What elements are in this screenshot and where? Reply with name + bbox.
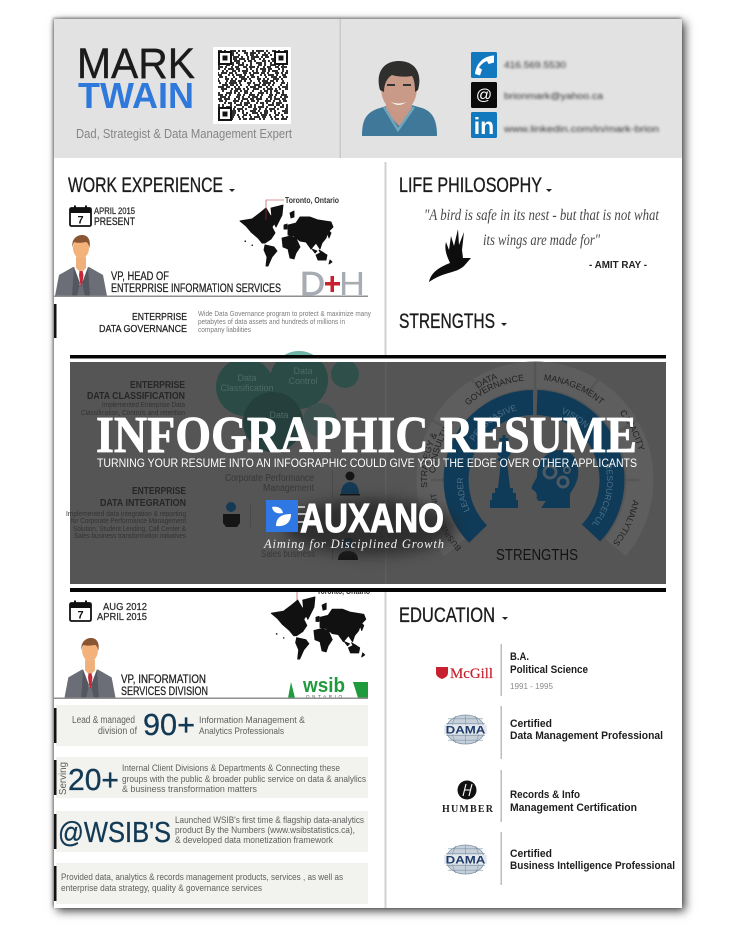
icon: manager at desk: [340, 472, 360, 496]
wheel labels: DATA: [476, 374, 498, 388]
second job: calendar icon: [70, 600, 91, 622]
job title: [111, 271, 281, 295]
stat box: 20+: & business transformation matters: [122, 784, 257, 795]
education: McGill: 1991 - 1995: [510, 682, 554, 691]
name: [77, 40, 195, 116]
logo: WSIB: ONTARIO: [306, 694, 342, 699]
banner title: INFOGRAPHIC RESUME: [96, 407, 637, 464]
banner subtitle: TURNING YOUR RESUME INTO AN INFOGRAPHIC COULD GIVE YOU THE EDGE OVER OTHER APPLICANTS: [97, 456, 637, 470]
bubble chart: Data: [237, 373, 257, 383]
logo mark: [266, 500, 310, 532]
quote: - AMIT RAY -: [589, 259, 647, 271]
education: DAMA data management: Certified: [510, 718, 552, 730]
icon: bird: [429, 229, 471, 282]
role: data classification: [81, 380, 185, 417]
role: data integration: for Corporate Performance Management: [71, 518, 186, 525]
bubble chart: Classification: [220, 383, 274, 393]
world map: Toronto, Ontario: [285, 195, 339, 205]
wheel labels: CAPACITY: [620, 410, 645, 449]
role: data integration: [66, 486, 186, 540]
name: TWAIN: [78, 75, 194, 116]
education: Humber: HUMBER: [442, 804, 494, 815]
icon: chess king: [490, 435, 518, 508]
education: DAMA business intelligence: Certified: [510, 848, 552, 860]
stat box: 90+: division of: [98, 726, 137, 737]
wheel labels: CONSULTING: [429, 421, 454, 473]
role: data integration: DATA INTEGRATION: [100, 498, 186, 509]
wheel labels: STRATEGY &: [421, 434, 437, 488]
role: data integration: ENTERPRISE: [132, 486, 186, 497]
role: data integration: Solution, Student Lending, Call Center &: [73, 526, 186, 533]
second job: dates: AUG 2012: [103, 601, 147, 613]
education: McGill: McGill: [450, 666, 493, 682]
contact details: www.linkedin.com/in/mark-brion: [503, 124, 659, 134]
contact icon: email: @: [476, 87, 492, 104]
role: data governance: ENTERPRISE: [132, 311, 187, 323]
job title: ENTERPRISE INFORMATION SERVICES: [111, 283, 281, 295]
second job: executive icon: [64, 638, 116, 698]
corporate performance labels: [225, 470, 333, 560]
role: data governance: Wide Data Governance program to protect & maximize many: [198, 309, 371, 318]
contact icon: email: [471, 82, 497, 108]
dates: APRIL 2015: [94, 206, 135, 217]
stat box: 20+: [54, 757, 368, 798]
logo wordmark: AUXANO: [300, 495, 444, 541]
icon: head with gears: [532, 450, 578, 508]
role: data governance: petabytes of data assets and hundreds of millions in: [198, 317, 345, 326]
strengths wheel: [416, 362, 654, 564]
logo tagline: Aiming for Disciplined Growth: [263, 537, 444, 551]
role: data classification: DATA CLASSIFICATION: [87, 391, 185, 402]
world map: [240, 195, 339, 266]
role: data governance: company liabilities: [198, 325, 251, 334]
role: data classification: Implemented Enterprise Data: [102, 402, 185, 409]
logo: D+H: D: [300, 265, 325, 302]
dates: [94, 206, 135, 228]
wheel labels: MANAGEMENT: [544, 374, 604, 404]
stat box: 20+: 20+: [68, 762, 119, 797]
quote: "A bird is safe in its nest - but that is not what: [424, 207, 659, 224]
education: McGill: Political Science: [510, 664, 588, 676]
role: data governance: [99, 309, 371, 335]
contact details: 416.569.5530: [504, 60, 566, 70]
contact details: [503, 60, 659, 134]
education: DAMA data management: [444, 706, 663, 759]
stat box: 90+: Lead & managed: [72, 715, 135, 726]
second job: map label: Toronto, Ontario: [317, 586, 370, 596]
stat box: 90+: [54, 705, 368, 746]
inner ring labels: [457, 404, 613, 526]
logo: Auxano: [263, 495, 456, 555]
stat box: services: [54, 863, 368, 904]
logo: D+H: [300, 265, 365, 302]
icon: reader: [223, 502, 240, 527]
heading: strengths: STRENGTHS: [399, 310, 495, 333]
stat box: @WSIB'S: Launched WSIB's first time & flagship data-analytics: [175, 815, 364, 826]
second job: title: VP, INFORMATION: [121, 674, 206, 686]
quote: [424, 207, 659, 271]
corporate performance labels: Corporate Performance: [225, 472, 314, 484]
education: DAMA data management: Data Management Professional: [510, 730, 663, 742]
second job: dates: APRIL 2015: [97, 611, 147, 623]
banner overlay: [66, 355, 666, 592]
wheel caption: STRENGTHS: [496, 547, 578, 564]
education: McGill: [436, 644, 588, 696]
role: data classification: Classification, Controls and retention: [81, 410, 185, 417]
second job: map label: [297, 586, 370, 612]
name: MARK: [77, 40, 195, 88]
logo: D+H: H: [339, 265, 365, 302]
role: data governance: DATA GOVERNANCE: [99, 323, 187, 335]
inner ring labels: LEADER: [457, 478, 470, 512]
wheel labels: [421, 374, 645, 551]
job title: VP, HEAD OF: [111, 271, 169, 283]
inner ring labels: VISION: [563, 408, 588, 428]
education: Humber: Management Certification: [510, 802, 637, 814]
stat box: 90+: Analytics Professionals: [199, 726, 284, 737]
teal bubbles behind banner: [216, 351, 328, 416]
QR code: [213, 47, 291, 124]
stat box: services: Provided data, analytics & records management products, services , as well as: [61, 872, 343, 883]
education: Humber: Records & Info: [510, 789, 580, 801]
icon: executive: [55, 235, 107, 296]
wheel labels: ANALYTICS: [614, 500, 638, 546]
stat box: @WSIB'S: & developed data monetization framework: [175, 835, 333, 846]
corporate performance labels: Sales business: [261, 548, 315, 560]
bubble chart: [216, 362, 359, 452]
bubble chart: Data: [293, 366, 313, 376]
stat box: 20+: groups with the public & broader public service on data & analylics: [122, 774, 366, 785]
contact icon: linkedin: in: [474, 113, 494, 139]
heading: education: EDUCATION: [399, 604, 495, 627]
stat box: 90+: 90+: [143, 707, 195, 742]
education: Humber: [442, 770, 637, 822]
role: data classification: ENTERPRISE: [130, 380, 185, 391]
wheel labels: GOVERNANCE: [465, 374, 524, 404]
accent bar: [54, 304, 56, 338]
bubble chart: Control: [288, 376, 318, 386]
tagline: Dad, Strategist & Data Management Expert: [76, 126, 292, 141]
education: DAMA business intelligence: [444, 832, 675, 885]
corporate performance labels: Management: [263, 482, 314, 494]
heading: work experience: WORK EXPERIENCE: [68, 174, 223, 197]
logo: WSIB: wsib: [302, 675, 345, 697]
second job: dates: [97, 601, 147, 623]
panel: header: [54, 19, 682, 158]
stat box: services: enterprise data strategy, quality & governance services: [61, 883, 262, 894]
stat box: @WSIB'S: @WSIB'S: [58, 817, 171, 849]
heading: life philosophy: LIFE PHILOSOPHY: [399, 174, 542, 197]
column divider: [384, 162, 386, 908]
portrait: [362, 61, 437, 136]
education: McGill: B.A.: [510, 651, 529, 663]
contact details: brionmark@yahoo.ca: [504, 91, 603, 101]
stat box: @WSIB'S: [54, 811, 368, 852]
logo: WSIB: [288, 675, 368, 699]
education: DAMA business intelligence: Business Intelligence Professional: [510, 860, 675, 872]
stat box: 20+: Internal Client Divisions & Departments & Connecting these: [122, 763, 340, 774]
dates: PRESENT: [94, 216, 135, 228]
second job: title: SERVICES DIVISION: [121, 686, 208, 698]
inner ring labels: PERSUASIVE: [470, 404, 517, 441]
inner ring labels: RESOURCEFUL: [592, 464, 613, 526]
quote: its wings are made for": [483, 232, 600, 249]
icon: calendar: [70, 206, 91, 226]
second job: title: [121, 674, 208, 698]
wheel labels: BUSINESS UNIT: [430, 494, 461, 551]
stat box: @WSIB'S: product By the Numbers (www.wsibstatistics.ca),: [175, 825, 355, 836]
second job: world map: [271, 597, 366, 659]
stat box: 90+: Information Management &: [199, 715, 306, 726]
bubble chart: Data: [269, 410, 289, 420]
role: data integration: Implemented data integration & reporting: [66, 511, 186, 518]
stat box: 20+: Serving: [58, 762, 69, 795]
contact icon: phone: [471, 52, 497, 78]
icon: sales person: [338, 538, 358, 560]
role: data integration: Sales business transformation initiatives: [74, 533, 186, 540]
